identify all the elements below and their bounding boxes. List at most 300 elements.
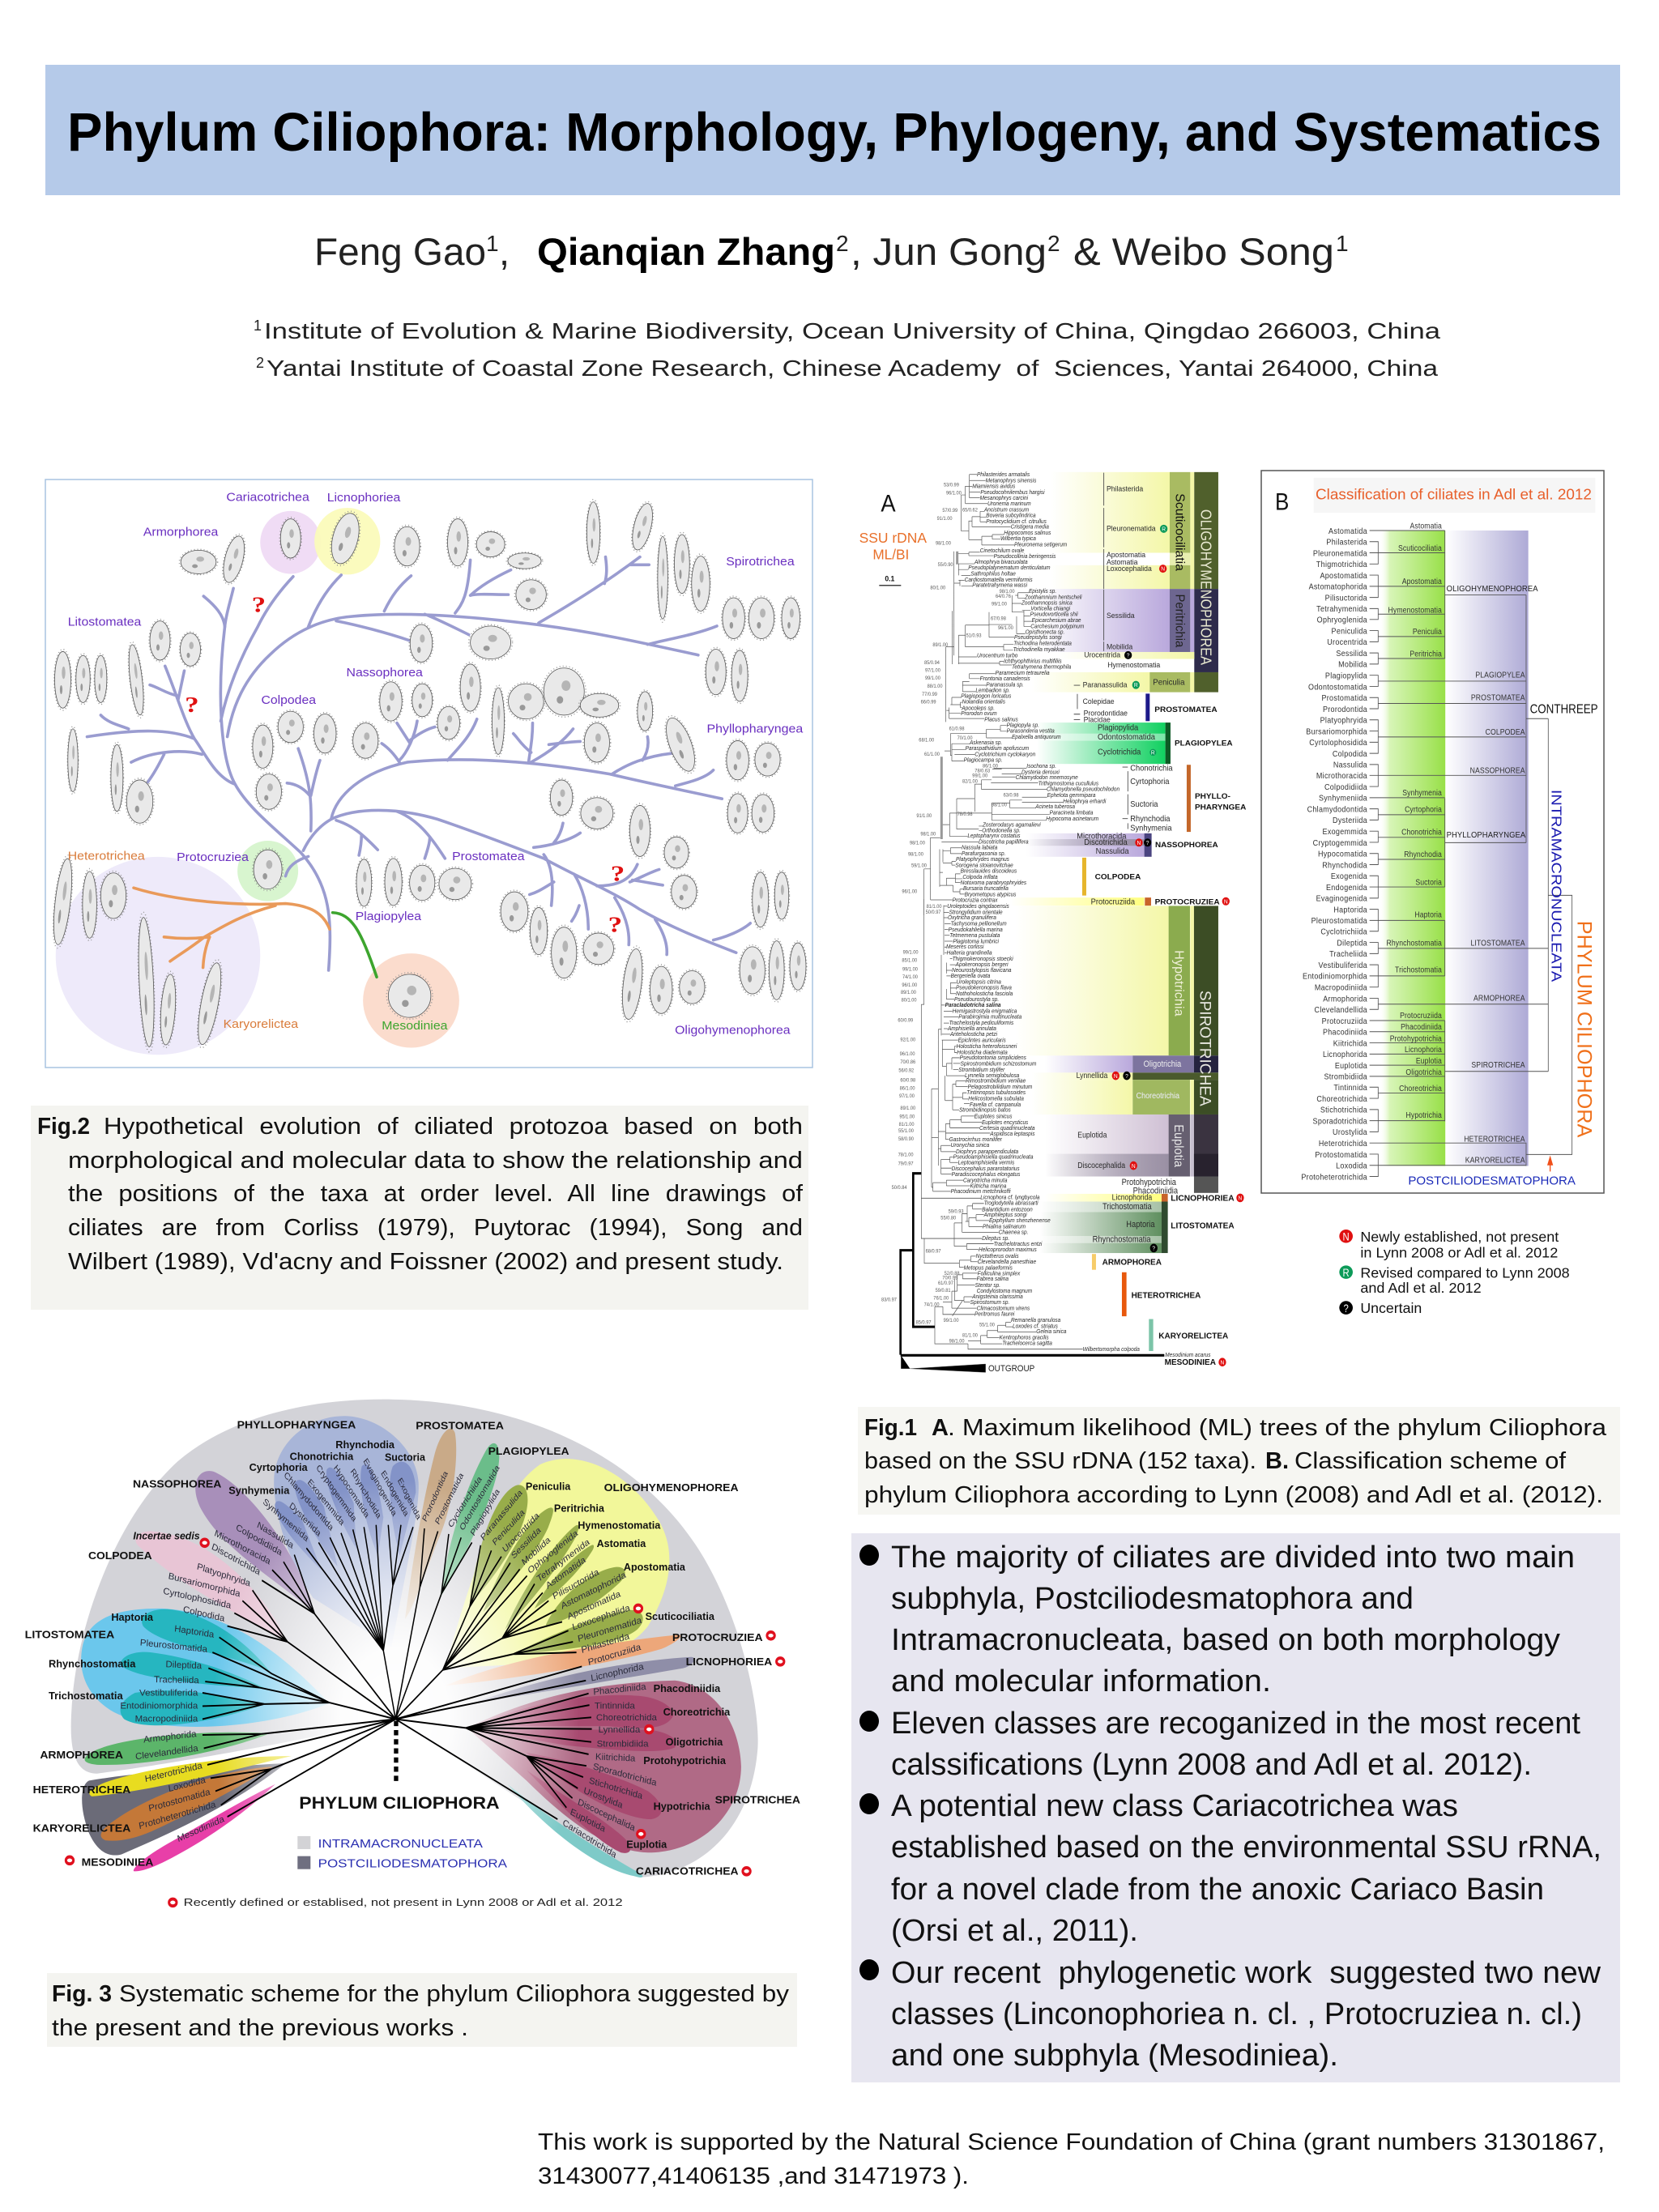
support values: 99/1.00 [902,966,918,973]
uncertain question marks: ? [611,861,625,886]
support values: 56/0.92 [898,1068,915,1074]
support values: 96/1.00 [900,1051,915,1057]
taxon names: Tetmemena pustulata [949,933,1000,939]
support values: 52/0.88 [945,1271,960,1276]
taxon names: Spirostrombidium schizostomum [961,1061,1037,1068]
class bold labels: PHYLLO- [1195,792,1230,800]
order names: Sessilida [1336,649,1367,658]
legend: status markers: in Lynn 2008 or Adl et al. 2012 [1360,1246,1558,1261]
support values: 55/0.90 [938,563,953,568]
order names: Hypocomatida [1318,850,1367,859]
right bold labels: SPIROTRICHEA [715,1794,801,1806]
left bold labels: Rhynchodia [335,1439,395,1451]
right rotated order labels: Stichotrichida [588,1776,644,1802]
order names: Chlamydodontida [1307,805,1367,815]
taxon names: Chlamydodon mnemosyne [1016,775,1078,781]
status markers: N [1161,566,1165,573]
subclass names [1387,522,1525,1165]
uncertain question marks: ? [185,693,199,717]
legend: subphyla: INTRAMACRONUCLEATA [318,1836,483,1850]
support values: 81/1.00 [927,904,942,910]
order labels: Lynnellida [1077,1072,1108,1080]
taxon names: Phacodinium metchnikoffi [951,1189,1011,1195]
taxon names: Fabrea salina [977,1276,1009,1282]
support values: 67/0.98 [991,617,1006,622]
order names: Evaginogenida [1316,894,1367,904]
order names: Ophryoglenida [1317,616,1367,625]
bullet text: subphyla, Postciliodesmatophora and [891,1582,1414,1616]
panel A lower: SSU rDNA tree [881,899,1244,1374]
taxon names: Tachysoma pellionellum [951,921,1007,927]
order labels: Prorodontidae [1084,709,1128,718]
vertical group labels: Scuticociliatia [1172,493,1186,571]
taxon names: Apokeronopsis bergeri [955,962,1009,968]
support values: 91/1.00 [937,517,953,522]
authors: 2 [1047,231,1060,256]
taxon names: Sorogena stoianovitchae [955,863,1013,868]
subphylum and phylum labels: CONTHREEP [1530,703,1598,717]
funding note: This work is supported by the Natural Science Foundation of China (grant numbers 31301867, [538,2129,1605,2155]
subclass names: Oligotrichia [1405,1068,1443,1076]
left rotated order labels: Endogenida [379,1469,410,1519]
taxon names: Spirostomum sp. [970,1300,1009,1306]
subphylum and phylum labels: PHYLUM CILIOPHORA [1573,921,1597,1138]
class labels on left of bracket: OLIGOHYMENOPHOREA [1447,584,1538,593]
class labels on left of bracket [1447,584,1538,839]
taxon names: Pleuronema setigerum [1014,542,1068,548]
order names: Protocruziida [1322,1016,1367,1026]
left bold labels: MESODINIEA [82,1856,154,1869]
right rotated order labels: Lynnellida [599,1725,641,1735]
order names: Euplotida [1335,1061,1367,1071]
authors: , [499,230,510,273]
left rotated order labels: Hypocomatida [332,1464,370,1520]
right bold labels: LICNOPHORIEA [686,1656,773,1669]
class labels on left of bracket: PHYLLOPHARYNGEA [1447,831,1526,839]
taxon names: Loxodes cf. striatus [1013,1323,1058,1329]
left rotated order labels: Macropodiniida [135,1715,198,1724]
support values: 57/0.99 [942,509,957,514]
order labels: Microthoracida [1077,832,1127,841]
taxon names: Isochona sp. [1026,764,1056,769]
order labels: Cyrtophoria [1130,778,1170,786]
order names: Pleurostomatida [1311,917,1367,926]
support values: 55/0.80 [940,1215,957,1221]
bracket lines [1370,531,1572,1177]
order names: Dileptida [1337,939,1367,948]
taxon names: Troglodytella abrassarti [984,1200,1038,1207]
right bold labels: Protohypotrichia [643,1755,727,1767]
taxon names: Sathrophilus holtae [970,572,1016,578]
subclass names: PLAGIOPYLEA [1475,671,1525,680]
taxon names: Acineta tuberosa [1034,804,1075,810]
authors: Qianqian Zhang [537,230,835,273]
taxon names: Chaenea sp. [999,1230,1028,1236]
support values: 61/1.00 [924,752,940,757]
taxon names: Dysteria derouxi [1021,769,1060,775]
left rotated order labels: Protostomatida [148,1788,211,1814]
right bold labels [416,1420,801,1877]
status markers: ? [1152,1245,1155,1252]
order names: Pilisuctorida [1325,594,1367,603]
support values: 81/1.00 [962,1332,978,1339]
order labels: Haptoria [1126,1220,1155,1230]
taxon names: Cyclotrichium cyclokaryon [975,752,1036,758]
bullet text: for a novel clade from the anoxic Cariaco Basin [891,1873,1544,1907]
subclass names: Hypotrichia [1406,1111,1443,1119]
left rotated order labels: Chlamydodontida [282,1470,335,1533]
right rotated order labels: Discocephalida [577,1797,637,1834]
taxon names: Paracineta limbata [1050,810,1094,816]
taxon names: Ephelota gemmipara [1047,793,1096,799]
class labels: Heterotrichea [68,848,145,863]
panel letter and method label: SSU rDNA [859,530,928,546]
subclass names: Euplotia [1416,1056,1443,1065]
panel letter and method label: ML/BI [872,547,909,563]
class labels: Cariacotrichea [226,489,309,504]
taxon names: Hemigastrostyla enigmatica [953,1008,1017,1015]
taxon names: Dileptus sp. [982,1236,1009,1242]
status markers: ? [1146,841,1149,846]
order names: Odontostomatida [1308,683,1367,692]
taxon names: Holosticha diademata [957,1050,1008,1055]
order names: Astomatida [1328,526,1367,536]
panel letter and title [1275,478,1595,515]
right bold labels: Apostomatia [624,1562,686,1573]
panel letter and method label: 0.1 [885,574,894,583]
clade: Colpodea [135,1531,286,1640]
taxon names: Almophrya bivacuolata [974,560,1028,565]
support values: 91/1.00 [916,814,932,819]
support values: 68/1.00 [919,739,935,744]
tree branches [901,899,1164,1372]
taxon names: Meseres corlissi [946,944,984,950]
status markers: R [1162,526,1166,532]
subclass names: Protohypotrichia [1390,1034,1443,1042]
left rotated order labels: Loxodida [168,1775,207,1795]
support values: 50/0.84 [892,1185,907,1191]
support values: 99/1.00 [992,602,1008,607]
panel: Fig.3 radial scheme [25,1400,801,1958]
order names: Cyclotrichiida [1320,927,1367,937]
vertical group labels [1172,493,1214,665]
vertical group labels: SPIROTRICHEA [1196,991,1213,1106]
taxon names: Cinetochilum ovale [980,548,1025,554]
subclass names: NASSOPHOREA [1470,766,1525,775]
right bold labels: Euplotia [626,1839,667,1851]
taxon names: Notoxoma parabryophryides [961,880,1027,886]
support values: 59/0.93 [949,1208,964,1215]
support values: 88/1.00 [928,684,943,689]
left rotated order labels: Cryptogemmida [314,1463,358,1524]
support values: 78/0.63 [975,769,990,774]
subclass names: KARYORELICTEA [1465,1156,1525,1165]
order labels: Chonotrichia [1130,764,1173,773]
taxon names: Uronychia sinica [951,1143,989,1149]
taxon names: Trichodinella myakkae [1013,647,1065,653]
support values: 99/1.00 [925,676,941,681]
clade: Litostomatea [81,1609,330,1727]
taxon names: Mesodinium acarus [1165,1353,1211,1358]
vertical group labels [1171,950,1213,1168]
taxon names: Protocruzia contrax [953,897,998,904]
taxon names: Anteholosticha petzi [949,1032,997,1038]
taxon names: Paracladotricha salina [945,1003,1001,1008]
bullet text: classes (Linconophoriea n. cl. , Protocruziea n. cl.) [891,1997,1582,2031]
taxon names: Paranassula sp. [986,682,1024,688]
order names: Colpodidiida [1324,782,1367,792]
left rotated order labels [120,1457,422,1844]
white glow at hub [212,1481,579,1958]
order names: Kiitrichida [1333,1039,1367,1049]
class labels: Oligohymenophorea [675,1023,791,1037]
taxon names: Pseudocohnilembus hargisi [980,490,1045,496]
order labels: Paranassulida [1083,680,1127,689]
title banner: Phylum Ciliophora: Morphology, Phylogeny, and Systematics [67,102,1601,163]
taxon names: Epiclintes auricularis [958,1038,1006,1044]
order names: Phacodiniida [1323,1028,1367,1038]
panel letter and title: Classification of ciliates in Adl et al. 2012 [1316,486,1592,503]
taxon names: Parasonderia vestita [1007,728,1055,735]
subclass names: Astomatia [1410,522,1443,530]
legend: subphyla: POSTCILIODESMATOPHORA [318,1856,507,1870]
taxon names: Opisthonecta sp. [1026,629,1064,636]
left bold labels: COLPODEA [88,1550,152,1562]
taxon names: Paratetrahymena wassi [972,582,1028,589]
order names [1301,526,1367,1183]
order labels: Urocentrida [1084,650,1120,659]
order names: Tintinnida [1333,1084,1367,1093]
class bold labels: MESODINIEA [1165,1357,1216,1367]
clade: Postciliodesmatophora [82,1763,286,1856]
subclass names: Phacodiniida [1401,1023,1443,1031]
taxon names: Tintinnopsis tubulosoides [966,1090,1026,1096]
taxon names: Lynnella semiglobulosa [965,1073,1019,1079]
support values: 97/1.00 [899,1093,915,1099]
order names: Urostylida [1333,1128,1367,1137]
subclass names: Scuticociliatia [1398,544,1443,552]
taxon names: Metanophrys sinensis [986,478,1037,484]
taxon names: Trichodina heterodentata [1013,641,1072,646]
main purple branches [87,557,750,970]
taxon names: Halteria grandinella [947,950,992,957]
support values: 53/0.99 [944,484,959,488]
taxon names: Diophrys parappendiculata [956,1149,1018,1155]
right bold labels: Peritrichia [554,1502,605,1515]
left rotated order labels: Evaginogenida [361,1457,398,1519]
class bold labels: PROTOCRUZIEA [1155,897,1220,906]
caption: Fig.1 [858,1407,1620,1515]
taxon names: Plagiopogon loricatus [961,693,1012,699]
right bold labels: Oligotrichia [666,1737,723,1748]
left bold labels: Chonotrichia [290,1451,354,1463]
taxon names: Hippocomos salinus [1004,531,1051,536]
class labels [68,489,804,1037]
right rotated order labels: Licnophorida [591,1662,645,1684]
vertical group labels: Hypotrichia [1172,950,1186,1016]
order labels: Synhymenia [1130,824,1172,833]
taxon names: Amphileptus songi [983,1213,1027,1218]
support values: 58/0.90 [898,1136,914,1142]
taxon names: Balantidium entozoon [982,1207,1033,1213]
class labels: Licnophoriea [327,490,401,504]
taxon names: Epicarchesium abrae [1032,618,1081,624]
taxon names: Zoothamnopsis sinica [1021,600,1073,606]
caption: Fig.3 [47,1973,797,2047]
right rotated order labels: Paranassulida [480,1488,524,1543]
support values: 98/1.00 [910,841,926,846]
left rotated order labels: Tracheliida [154,1675,199,1686]
left bold labels: Cyrtophoria [249,1462,308,1473]
order names: Platyophryida [1320,716,1367,726]
right bold labels: Scuticociliatia [646,1611,715,1623]
right rotated order labels [421,1463,658,1860]
caption: Fig.2 [31,1106,808,1310]
funding note [538,2129,1605,2189]
taxon names: Prorodon ovum [961,711,997,717]
legend: status markers: Revised compared to Lynn 2008 [1360,1266,1570,1281]
taxon names: Nothoholosticha fasciola [956,991,1013,997]
taxon names: Helicoprorodon maximus [979,1247,1037,1253]
order labels: Choreotrichia [1137,1092,1180,1101]
caption: Fig.3: Systematic scheme for the phylum Ciliophora suggested by [119,1981,790,2007]
taxon names: Holosticha heterofoissneri [957,1044,1017,1050]
support values: 98/1.00 [936,541,952,547]
class labels: Spirotrichea [726,554,795,568]
grey background of Intramacronucleata [71,1400,758,1877]
order names: Entodiniomorphida [1303,972,1367,982]
status markers: N [1239,1195,1242,1202]
taxon names: Platyophrydes magnus [956,857,1010,863]
support values: 65/0.62 [962,508,978,513]
order names: Vestibuliferida [1319,961,1367,970]
taxon names: Peritromus faurei [975,1311,1015,1318]
bullet text: established based on the environmental SSU rRNA, [891,1831,1601,1865]
funding note: 31430077,41406135 ,and 31471973 ). [538,2163,969,2189]
order names: Cryptogemmida [1313,838,1367,848]
order labels: Sessilida [1107,612,1135,620]
taxon names: Caryotricha minuta [963,1178,1008,1184]
vertical group labels: OLIGOHYMENOPHOREA [1196,509,1214,665]
bullet text: Eleven classes are recoganized in the most recent [891,1707,1580,1741]
left rotated order labels: Platyophryida [196,1562,251,1589]
order labels: Hymenostomatia [1107,661,1160,669]
status markers [1124,525,1230,906]
left rotated order labels: Colpodidiida [235,1523,284,1558]
taxon names: Paradiscocephalus elongatus [952,1171,1021,1178]
support values: 99/1.00 [903,949,919,956]
taxon names: Zosterodasys agamalievi [982,822,1041,828]
class labels: Nassophorea [347,665,423,679]
taxon names: Heliophrya erhardi [1063,799,1107,804]
support values: 68/0.97 [926,1248,941,1255]
taxon names: Philasterides armatalis [977,472,1030,478]
bullet text: (Orsi et al., 2011). [891,1914,1138,1948]
taxon names: Hypocoma acinetarum [1046,816,1099,822]
taxon names: Pseudotontonia simplicidens [960,1055,1026,1061]
status markers: N [1221,1359,1224,1366]
support values: 55/1.00 [979,1322,995,1328]
taxon names: Bresslauides discoideus [961,868,1017,875]
caption: Fig.1: phylum Ciliophora according to Lynn (2008) and Adl et al. (2012). [864,1482,1603,1508]
order names: Tetrahymenida [1316,605,1367,614]
taxon names: Frontonia canadensis [980,676,1030,682]
vertical group labels: Peritrichia [1172,595,1186,647]
taxon names: Bergeriella ovata [951,974,990,979]
taxon names: Chlamydonella pseudochilodon [1047,787,1120,793]
order labels: Colepidae [1083,697,1115,705]
affiliations: 1 [254,318,262,334]
order labels: Apostomatia [1107,551,1145,559]
support values: 70/1.00 [957,736,973,741]
taxon names: Boveria subcylindrica [986,513,1036,519]
right rotated order labels: Prorodontida [421,1469,450,1524]
taxon names: Geleia sinica [1036,1329,1067,1335]
left bold labels: LITOSTOMATEA [25,1630,115,1641]
order labels: Plagiopylida [1098,723,1139,732]
taxon names: Miamiensis avidus [972,484,1016,490]
status markers: ? [1127,653,1130,658]
legend: status markers: and Adl et al. 2012 [1360,1281,1482,1296]
left rotated order labels: Clevelandellida [135,1744,199,1762]
left rotated order labels: Bursariomorphida [168,1571,241,1600]
caption: Fig.1: B. [1265,1448,1289,1474]
subclass names: COLPODEA [1486,727,1525,736]
taxon names: Ancistrum crassum [983,507,1029,513]
order names: Protostomatida [1315,1150,1367,1160]
taxon names: Euplotes sinicus [975,1114,1013,1120]
legend: status markers: R [1343,1266,1350,1279]
legend: subphyla [297,1836,507,1870]
panel letter and method label: A [881,491,896,518]
taxon names: Thigmokeronopsis stoecki [953,956,1013,962]
status markers: N [1224,899,1228,905]
support values: 63/0.98 [1004,793,1019,799]
right rotated order labels: Tetrahymenida [535,1537,591,1584]
legend: status markers: Newly established, not present [1360,1230,1559,1245]
left rotated order labels: Entodiniomorphida [120,1702,198,1711]
order labels: Phacodiniidia [1133,1187,1178,1196]
highlight circles [56,508,459,1055]
order labels: Discotrichida [1084,838,1128,847]
order labels: Mobilida [1107,642,1132,651]
taxon names: Pseudokeronopsis flava [956,985,1012,991]
support values: 60/0.99 [898,1017,914,1024]
right rotated order labels: Pilisuctorida [552,1567,600,1602]
taxon names: Oxytricha granulifera [948,915,996,921]
clade: Mesodiniea [134,1784,275,1871]
order names: Synhymeniida [1319,794,1367,803]
status markers: R [1151,750,1155,756]
authors [314,230,1349,273]
status markers [1112,1072,1244,1366]
order labels: Pleuronematida [1107,524,1156,532]
uncertain question marks [185,592,625,937]
taxon names: Nassula labiata [962,845,998,851]
order names: Prorodontida [1323,705,1367,714]
bullet text [891,1541,1601,2073]
order labels: Suctoria [1130,800,1158,809]
left rotated order labels: Cyrtolophosidida [163,1587,232,1611]
right rotated order labels: Sporadotrichida [592,1762,658,1788]
taxon names: Anigsteinia clarissima [971,1294,1023,1300]
right rotated order labels: Urostylida [582,1786,624,1811]
taxon names: Kentrophoros gracilis [1000,1335,1049,1341]
support values: 98/1.00 [949,1338,965,1344]
right bold labels: Hypotrichia [654,1801,710,1813]
support values: 80/1.00 [930,586,946,591]
class bold labels: LICNOPHORIEA [1171,1194,1235,1204]
